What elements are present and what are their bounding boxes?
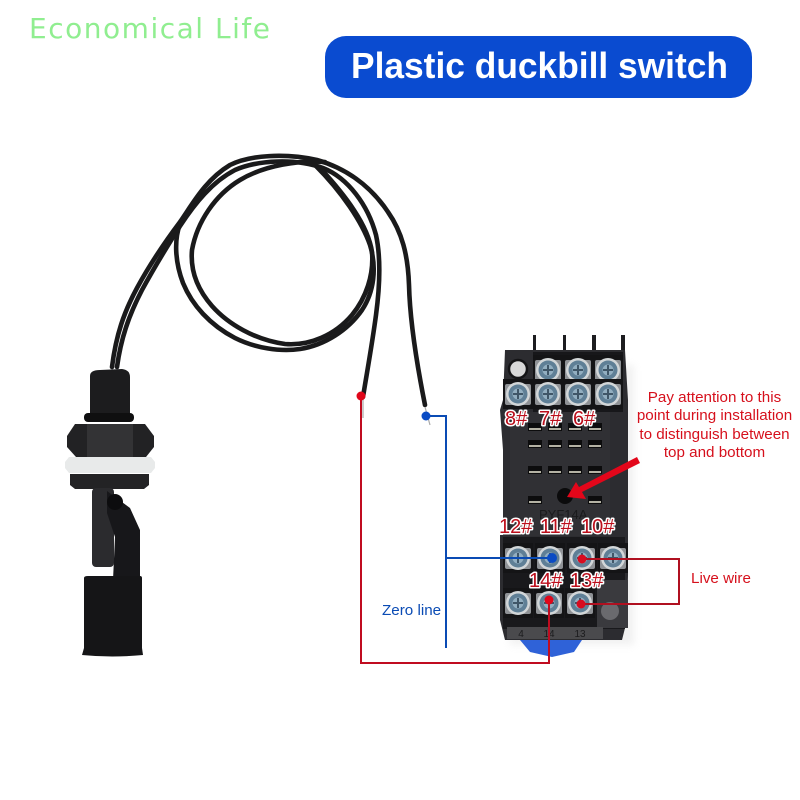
terminal number strip xyxy=(507,627,603,640)
relay socket xyxy=(500,335,634,657)
brand name: Economical Life xyxy=(29,12,270,45)
terminal number strip: 4 xyxy=(518,629,524,640)
terminal numbers: 14# xyxy=(529,570,563,592)
socket slots xyxy=(528,423,602,504)
terminal numbers xyxy=(499,408,615,592)
hex nut xyxy=(67,424,154,457)
model mark: PYF14A xyxy=(539,507,588,522)
centre plate xyxy=(510,412,610,536)
terminal numbers: 11# xyxy=(540,516,573,538)
installation note: top and bottom xyxy=(664,444,765,461)
upper screws xyxy=(503,355,623,409)
lower screws xyxy=(503,543,628,618)
terminal numbers: 7# xyxy=(539,408,562,430)
centre hole xyxy=(557,488,573,504)
white washer xyxy=(65,457,155,473)
mounting hole top xyxy=(509,360,527,378)
installation note: to distinguish between xyxy=(639,426,790,443)
socket body xyxy=(500,350,628,640)
neutral return wiring xyxy=(356,392,554,663)
title pill: Plastic duckbill switch xyxy=(351,45,728,86)
terminal numbers: 12# xyxy=(499,516,533,538)
soft shadow xyxy=(510,365,634,645)
stem xyxy=(92,488,114,567)
float body xyxy=(82,576,143,656)
blue clip xyxy=(520,640,582,657)
terminal numbers: 6# xyxy=(573,408,596,430)
red wire tip xyxy=(362,397,364,418)
terminal number strip: 14 xyxy=(543,629,555,640)
title pill xyxy=(325,36,752,98)
terminal number strip: 13 xyxy=(574,629,586,640)
lower nut xyxy=(70,474,149,489)
terminal numbers: 13# xyxy=(570,570,604,592)
live wire label: Live wire xyxy=(691,570,751,587)
float switch xyxy=(65,369,155,656)
blue wire tip xyxy=(425,407,430,425)
live wire wiring xyxy=(576,554,679,608)
lower terminal well xyxy=(503,537,625,629)
o-ring xyxy=(84,413,134,422)
installation note: point during installation xyxy=(637,407,792,424)
pivot screw xyxy=(107,494,123,510)
zero line wiring xyxy=(422,412,557,648)
terminal numbers: 10# xyxy=(581,516,615,538)
mounting lug bottom xyxy=(597,580,628,628)
cable xyxy=(112,156,430,425)
arrow to centre hole xyxy=(567,457,640,499)
terminal numbers: 8# xyxy=(505,408,528,430)
top cylinder xyxy=(90,369,130,416)
installation note xyxy=(637,389,792,461)
lever arm xyxy=(107,491,140,580)
installation note: Pay attention to this xyxy=(648,389,782,406)
zero line label: Zero line xyxy=(382,602,441,619)
top terminal well xyxy=(533,352,623,412)
top pins xyxy=(533,335,625,352)
